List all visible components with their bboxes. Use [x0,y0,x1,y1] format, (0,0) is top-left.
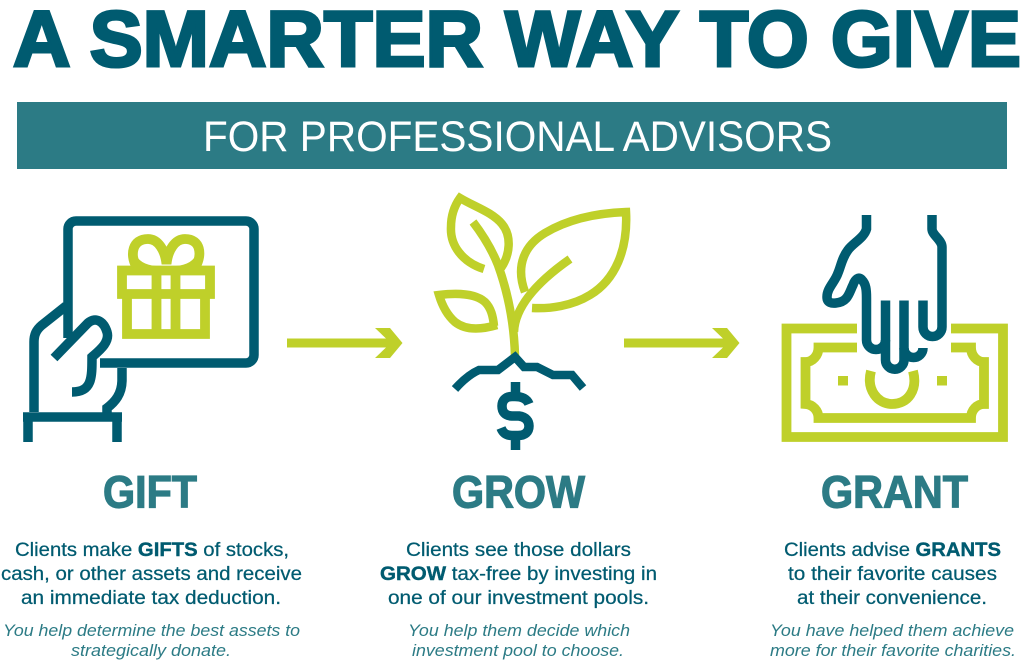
gift description: cash, or other assets and receive [1,563,302,585]
grant description: Clients advise GRANTS [784,539,1001,561]
gift advisor note: You help determine the best assets to [3,621,300,640]
gift description [1,539,302,609]
grow advisor note: You help them decide which [408,621,630,640]
grow description: GROW tax-free by investing in [380,563,657,585]
grant advisor note: You have helped them achieve [770,621,1014,640]
panel: grant [770,215,1016,660]
heading: grant: GRANT [821,466,968,518]
arrow: gift to grow [287,328,402,358]
gift description: an immediate tax deduction. [21,587,281,609]
arrow: grow to grant [624,328,740,358]
gift advisor note: strategically donate. [71,641,231,660]
grant advisor note [770,621,1016,660]
subtitle band [17,102,1007,169]
grow advisor note [408,621,630,660]
subtitle band: FOR PROFESSIONAL ADVISORS [203,113,832,161]
grow description [380,539,657,609]
grant description: at their convenience. [797,587,987,609]
icon: hand holding gift card [23,221,254,442]
grant advisor note: more for their favorite charities. [770,641,1016,660]
gift advisor note [3,621,300,660]
panel: grow [380,198,657,660]
grow description: Clients see those dollars [406,539,631,561]
heading: gift: GIFT [103,466,197,518]
grow description: one of our investment pools. [388,587,649,609]
heading: grow: GROW [452,466,585,518]
icon: plant with dollar roots [439,198,626,450]
grant description: to their favorite causes [788,563,997,585]
gift description: Clients make GIFTS of stocks, [15,539,289,561]
grant description [784,539,1001,609]
icon: hand over banknote [786,215,1003,437]
grow advisor note: investment pool to choose. [412,641,624,660]
panel: gift [1,221,302,660]
